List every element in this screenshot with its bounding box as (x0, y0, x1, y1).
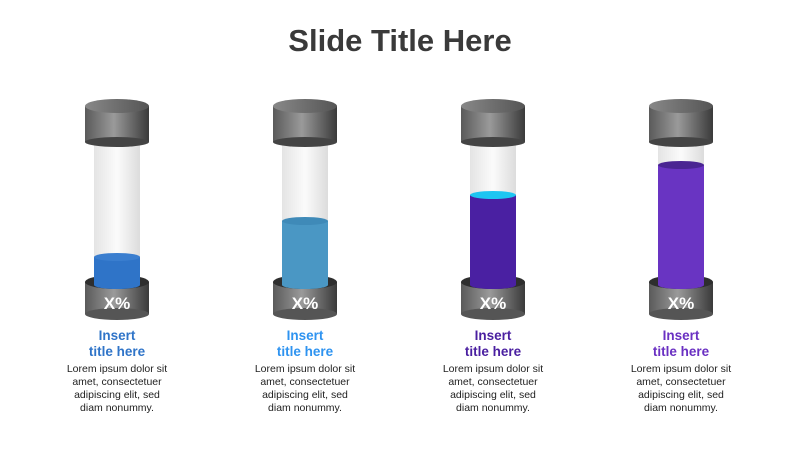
text block 2: Lorem ipsum dolor sit (255, 363, 355, 375)
text block 4: adipiscing elit, sed (638, 389, 724, 401)
text block 2: amet, consectetuer (260, 376, 350, 388)
text block 1: adipiscing elit, sed (74, 389, 160, 401)
tube 2 (273, 99, 337, 320)
text block 1: diam nonummy. (80, 402, 154, 414)
text block 3: Lorem ipsum dolor sit (443, 363, 543, 375)
text block 3: diam nonummy. (456, 402, 530, 414)
tube 1 (85, 99, 149, 320)
tube 3: X% (480, 294, 506, 313)
text block 4: title here (653, 344, 709, 359)
text block 2: diam nonummy. (268, 402, 342, 414)
text block 4: amet, consectetuer (636, 376, 726, 388)
tube 2: X% (292, 294, 318, 313)
text block 3: adipiscing elit, sed (450, 389, 536, 401)
text block 2: title here (277, 344, 333, 359)
text block 1: title here (89, 344, 145, 359)
text block 1 (67, 328, 168, 414)
text block 3: amet, consectetuer (448, 376, 538, 388)
text block 3: title here (465, 344, 521, 359)
text block 3: Insert (475, 328, 511, 343)
title: Slide Title Here (288, 23, 512, 58)
text block 2 (255, 328, 356, 414)
text block 4: Lorem ipsum dolor sit (631, 363, 731, 375)
text block 4: diam nonummy. (644, 402, 718, 414)
text block 2: adipiscing elit, sed (262, 389, 348, 401)
tube 4: X% (668, 294, 694, 313)
text block 3 (443, 328, 544, 414)
text block 1: amet, consectetuer (72, 376, 162, 388)
text block 1: Insert (99, 328, 135, 343)
text block 2: Insert (287, 328, 323, 343)
tube 4 (649, 99, 713, 320)
text block 4: Insert (663, 328, 699, 343)
tube 1: X% (104, 294, 130, 313)
text block 1: Lorem ipsum dolor sit (67, 363, 167, 375)
text block 4 (631, 328, 732, 414)
tube 3 (461, 99, 525, 320)
